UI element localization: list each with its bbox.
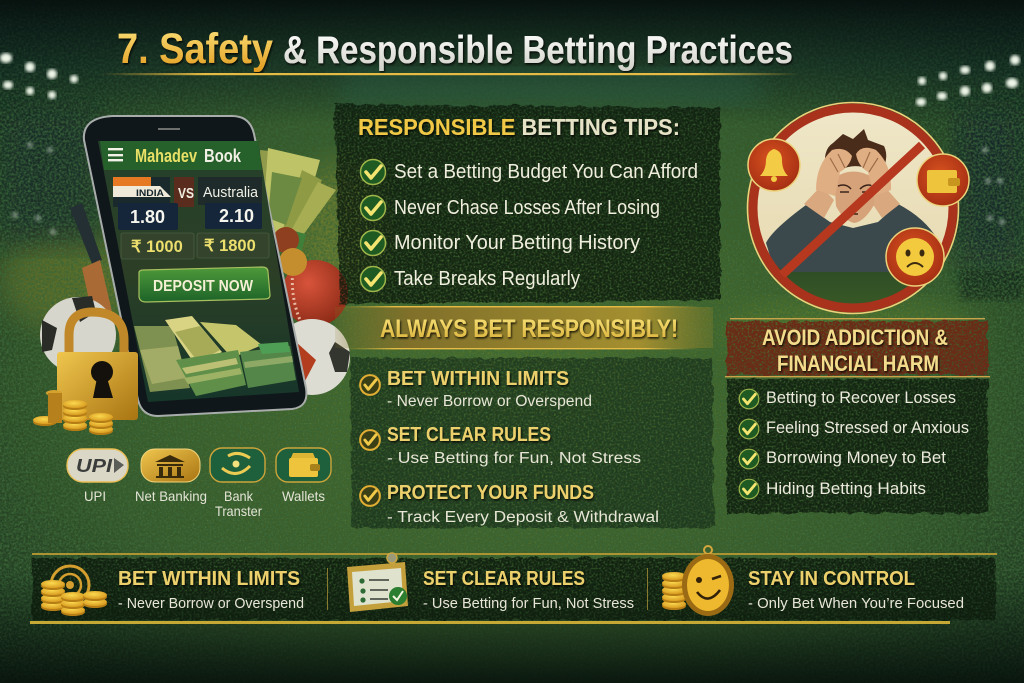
icon: target and coins	[41, 566, 107, 616]
app header: Mahadev Book: Book	[204, 146, 242, 166]
tip 3: Monitor Your Betting History	[394, 232, 640, 254]
tip 1: Set a Betting Budget You Can Afford	[394, 161, 698, 183]
rule: bet within limits	[360, 367, 592, 410]
man: forearms	[804, 186, 900, 218]
match: India vs Australia	[113, 177, 262, 207]
man: body	[766, 204, 938, 272]
icon: banknotes fan	[260, 148, 336, 245]
rule: set clear rules: - Use Betting for Fun, Not Stress	[387, 450, 641, 467]
title: 7. Safety	[117, 25, 273, 73]
man: closed eyes and brows	[838, 185, 873, 214]
stadium floodlights right	[916, 55, 1020, 106]
payment: bank transfer: Bank	[224, 488, 254, 504]
stadium floodlights left	[0, 53, 78, 99]
icon: checklist clipboard	[347, 553, 408, 612]
icon: sad face badge	[886, 228, 944, 286]
icon: gold coins	[33, 390, 113, 435]
button: deposit now	[139, 267, 270, 302]
banner: always bet responsibly	[335, 306, 713, 349]
banner: avoid addiction: AVOID ADDICTION &	[762, 325, 948, 350]
phone body	[84, 116, 306, 416]
strip item: bet within limits	[41, 566, 304, 616]
panel: rules list	[350, 358, 714, 528]
banner: avoid addiction	[725, 318, 990, 377]
icon: football right	[274, 319, 350, 395]
heading: tips: RESPONSIBLE BETTING TIPS:	[358, 114, 680, 140]
payment: wallets	[276, 448, 331, 504]
illustration: stressed man in prohibition sign	[748, 102, 969, 314]
odds	[118, 203, 262, 230]
tip 4: Take Breaks Regularly	[394, 268, 580, 290]
icon: padlock	[57, 312, 138, 420]
prohibition ring	[753, 108, 953, 308]
payment: bank transfer: Transter	[215, 503, 262, 519]
bottom strip	[30, 546, 997, 624]
harm item 1: Betting to Recover Losses	[766, 389, 956, 407]
payment: wallets: Wallets	[282, 488, 325, 504]
harm item 3: Borrowing Money to Bet	[766, 449, 946, 467]
man: hands on head	[816, 148, 891, 196]
harm item 2: Feeling Stressed or Anxious	[766, 419, 969, 437]
rule: set clear rules	[360, 423, 641, 467]
icon: winking stopwatch with coins	[662, 546, 734, 616]
stake amounts: ₹ 1800	[204, 237, 256, 255]
icon: cash pile	[134, 316, 296, 396]
strip item: set clear rules: - Use Betting for Fun, Not Stress	[423, 595, 634, 612]
strip item: bet within limits: - Never Borrow or Overspend	[118, 595, 304, 612]
rule: set clear rules: SET CLEAR RULES	[387, 423, 551, 446]
panel: avoid addiction and financial harm	[725, 318, 990, 513]
tip 2: Never Chase Losses After Losing	[394, 197, 660, 219]
icon: bell badge	[748, 139, 800, 191]
odds: 1.80	[130, 207, 165, 227]
rule: bet within limits: BET WITHIN LIMITS	[387, 367, 569, 390]
payment: UPI: UPI	[76, 456, 113, 476]
payment: net banking	[135, 449, 207, 504]
title underline	[100, 73, 800, 75]
strip item: bet within limits: BET WITHIN LIMITS	[118, 567, 300, 590]
match: India vs Australia: INDIA	[136, 188, 164, 199]
button: deposit now: DEPOSIT NOW	[153, 278, 254, 295]
rule: protect your funds: PROTECT YOUR FUNDS	[387, 481, 594, 504]
phone speaker	[158, 128, 180, 130]
payment: net banking: Net Banking	[135, 488, 207, 504]
icon: cricket ball	[273, 227, 348, 326]
icon: football left	[40, 296, 116, 373]
title: & Responsible Betting Practices	[283, 29, 793, 72]
strip item: stay in control: - Only Bet When You’re Focused	[748, 595, 964, 612]
harm item 4: Hiding Betting Habits	[766, 480, 926, 498]
rule: protect your funds: - Track Every Deposit & Withdrawal	[387, 509, 659, 526]
app header: Mahadev Book: Mahadev	[135, 146, 197, 166]
prohibition slash	[782, 145, 922, 275]
man: finger lines	[830, 152, 878, 172]
match: India vs Australia: Australia	[203, 184, 259, 201]
payment: UPI: UPI	[84, 488, 106, 504]
payment: UPI	[67, 449, 128, 504]
payment: bank transfer	[210, 448, 265, 519]
title	[117, 25, 793, 73]
strip item: stay in control: STAY IN CONTROL	[748, 567, 915, 590]
strip item: stay in control	[662, 546, 964, 616]
rule: protect your funds	[360, 481, 659, 526]
odds: 2.10	[219, 206, 254, 226]
icon: cricket bat	[70, 203, 115, 332]
stake amounts: ₹ 1000	[131, 238, 183, 256]
stake amounts	[121, 233, 269, 259]
banner: always bet responsibly: ALWAYS BET RESPONSIBLY!	[380, 315, 678, 343]
strip item: set clear rules	[347, 553, 634, 612]
phone screen	[98, 141, 299, 402]
rule: bet within limits: - Never Borrow or Overspend	[387, 393, 592, 410]
man: face	[834, 172, 874, 223]
banner: avoid addiction: FINANCIAL HARM	[777, 351, 939, 376]
app header: Mahadev Book	[100, 141, 262, 170]
strip item: set clear rules: SET CLEAR RULES	[423, 567, 585, 590]
match: India vs Australia: VS	[178, 185, 194, 202]
man: hair	[825, 129, 886, 178]
panel: responsible betting tips	[334, 104, 720, 304]
payment methods row	[67, 448, 331, 519]
stadium stand lights	[12, 142, 1005, 235]
illustration: phone with sports items, cash and padlock	[33, 116, 350, 435]
icon: wallet badge	[917, 154, 969, 206]
